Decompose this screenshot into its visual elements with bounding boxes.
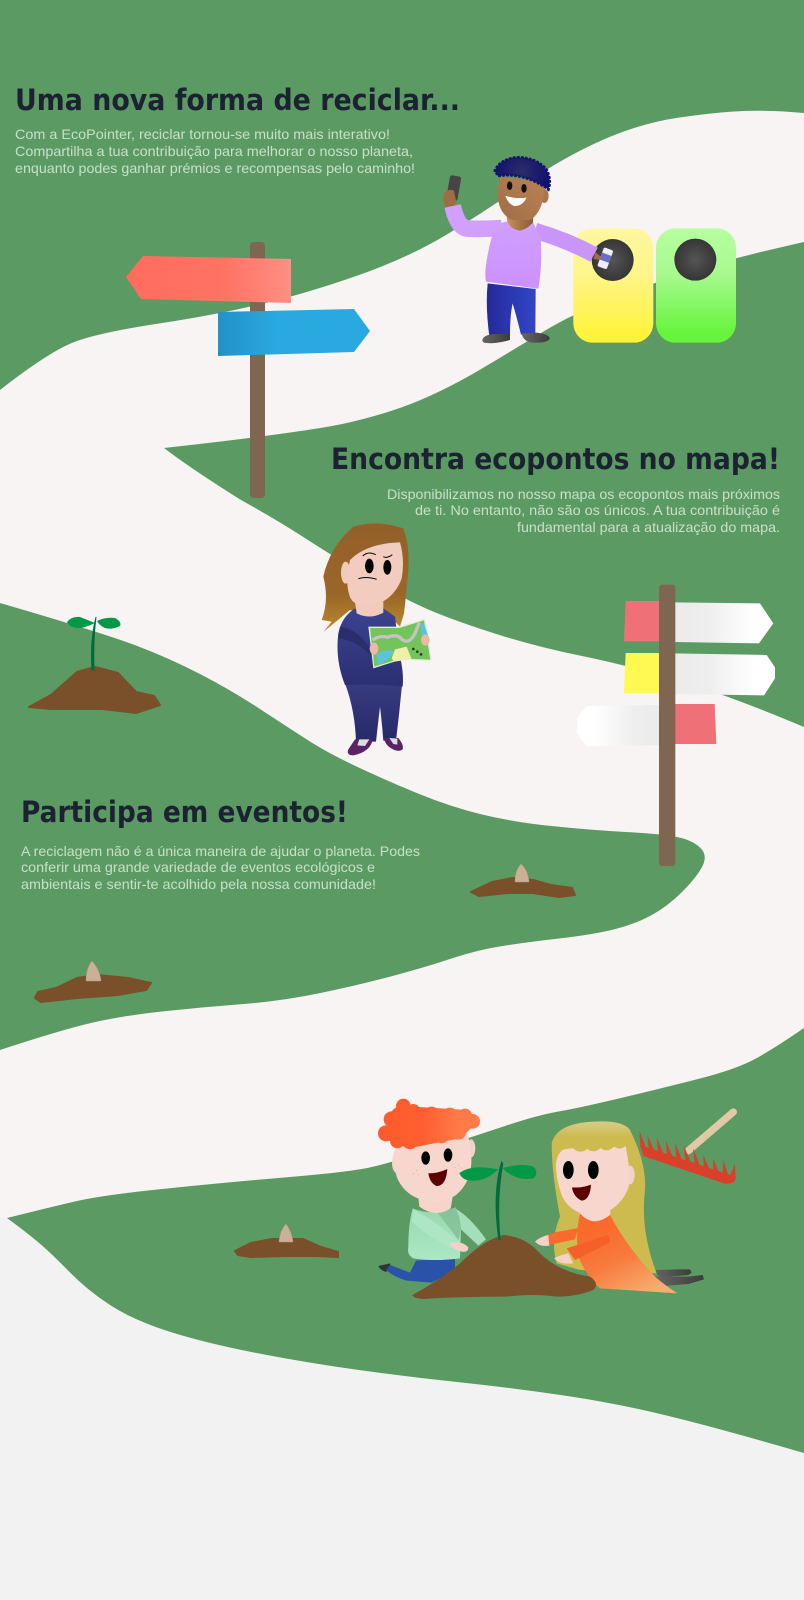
mound bbox=[235, 1239, 338, 1257]
arrow: red left bbox=[126, 256, 291, 303]
body text: events: A reciclagem não é a única maneira de ajudar o planeta. Podes bbox=[21, 843, 420, 859]
map markers bbox=[412, 648, 415, 650]
seed bbox=[86, 961, 101, 981]
girl: eyes bbox=[563, 1161, 574, 1179]
girl: ear bbox=[625, 1166, 635, 1184]
rake handle bbox=[688, 1112, 733, 1151]
green field: middle left bbox=[0, 603, 705, 1050]
girl: arm left bbox=[543, 1228, 578, 1245]
raised hand bbox=[443, 190, 456, 208]
brows and mouth bbox=[358, 553, 392, 579]
leaf left bbox=[459, 1167, 498, 1181]
body text: events: conferir uma grande variedade de eventos ecológicos e bbox=[21, 859, 375, 875]
arrow middle bbox=[624, 653, 775, 695]
green field: top bbox=[0, 0, 804, 390]
boy: face bbox=[393, 1133, 471, 1202]
bin: green bbox=[656, 228, 736, 343]
left arm bbox=[453, 206, 502, 229]
section: map text bbox=[331, 442, 780, 535]
boy: pants bbox=[386, 1257, 455, 1283]
torso bbox=[485, 222, 541, 289]
scene: children planting bbox=[378, 1099, 736, 1299]
boy: shoe bbox=[378, 1263, 391, 1272]
background: path colour bbox=[0, 0, 804, 1218]
boy: shirt bbox=[408, 1207, 461, 1260]
girl: face bbox=[556, 1143, 629, 1215]
phone bbox=[446, 175, 461, 201]
girl: bangs bbox=[553, 1137, 627, 1158]
body text: map: de ti. No entanto, não são os únicos. A tua contribuição é bbox=[415, 502, 780, 518]
eyes bbox=[365, 559, 374, 573]
stem bbox=[496, 1161, 503, 1240]
leaf right bbox=[97, 618, 120, 629]
shoes bbox=[348, 738, 403, 755]
girl: mouth bbox=[572, 1185, 591, 1201]
leaf right bbox=[503, 1165, 536, 1179]
body text: events: ambientais e sentir-te acolhido pela nossa comunidade! bbox=[21, 876, 376, 892]
girl: dress bbox=[577, 1213, 677, 1293]
right arm bbox=[535, 231, 594, 255]
girl: hands bbox=[535, 1235, 573, 1264]
green field: right bbox=[164, 242, 804, 727]
torso bbox=[337, 608, 403, 687]
neck bbox=[507, 215, 533, 231]
section: events text bbox=[21, 795, 420, 892]
sprout bbox=[459, 1161, 536, 1240]
post bbox=[250, 242, 265, 498]
boy: freckles bbox=[413, 1164, 461, 1175]
leaf left bbox=[67, 617, 95, 628]
bin: yellow bbox=[573, 228, 653, 343]
girl: hair bbox=[552, 1121, 657, 1273]
boy: hand bbox=[449, 1242, 468, 1252]
map field bbox=[392, 647, 412, 662]
ear bbox=[341, 562, 350, 584]
eyes bbox=[507, 181, 512, 190]
body text: map: fundamental para a atualização do mapa. bbox=[517, 519, 780, 535]
rake bbox=[639, 1112, 736, 1184]
mound bbox=[471, 878, 575, 897]
face bbox=[497, 177, 544, 223]
smile bbox=[505, 196, 527, 206]
body text: recycling: Compartilha a tua contribuição para melhorar o nosso planeta, bbox=[15, 143, 413, 159]
rake head bbox=[639, 1131, 736, 1184]
ear bbox=[540, 189, 549, 203]
boy: arm bbox=[412, 1209, 460, 1248]
seed bbox=[515, 864, 529, 882]
body text: recycling bbox=[15, 126, 415, 176]
boy: ears bbox=[392, 1139, 475, 1173]
green field: bottom bbox=[7, 1028, 804, 1453]
girl: shoes bbox=[653, 1269, 704, 1286]
arm shade bbox=[338, 627, 372, 657]
body text: map bbox=[387, 486, 780, 535]
seed mound: right bbox=[471, 864, 575, 897]
girl: arm right bbox=[567, 1235, 610, 1260]
hair bbox=[495, 157, 550, 189]
recycling bins bbox=[573, 228, 736, 343]
heading: recycling: Uma nova forma de reciclar... bbox=[15, 83, 460, 117]
dirt mound bbox=[412, 1235, 596, 1299]
post bbox=[659, 585, 675, 866]
boy: mouth bbox=[428, 1169, 447, 1186]
map road bbox=[373, 623, 419, 641]
character: man recycling with phone bbox=[443, 157, 613, 343]
hand and can bbox=[593, 247, 613, 269]
neck front bbox=[507, 220, 533, 231]
body text: map: Disponibilizamos no nosso mapa os ecopontos mais próximos bbox=[387, 486, 780, 502]
boy: neck bbox=[418, 1197, 453, 1213]
body text: events bbox=[21, 843, 420, 892]
section: recycling text bbox=[15, 83, 460, 176]
hair bbox=[322, 523, 409, 632]
boy: eyes bbox=[421, 1151, 430, 1165]
hands bbox=[370, 643, 378, 655]
map lake bbox=[376, 651, 394, 665]
heading: events: Participa em eventos! bbox=[21, 795, 348, 829]
sprout on dirt mound bbox=[29, 617, 160, 713]
stem bbox=[92, 617, 96, 670]
seed bbox=[279, 1224, 293, 1242]
neck bbox=[355, 602, 383, 617]
body text: recycling: enquanto podes ganhar prémios e recompensas pelo caminho! bbox=[15, 160, 415, 176]
girl: neck bbox=[579, 1208, 611, 1224]
boy: shirt shade bbox=[437, 1208, 461, 1240]
shoes bbox=[482, 333, 550, 343]
body text: recycling: Com a EcoPointer, reciclar tornou-se muito mais interativo! bbox=[15, 126, 390, 142]
seed mound: left bbox=[35, 961, 151, 1002]
face bbox=[347, 542, 403, 605]
background: bottom area bbox=[0, 1218, 804, 1600]
pants bbox=[487, 283, 536, 336]
bin hole: yellow bbox=[592, 239, 634, 281]
character: woman with map bbox=[322, 523, 432, 755]
map bbox=[368, 618, 432, 668]
mound bbox=[29, 667, 160, 713]
arrow top bbox=[624, 601, 773, 643]
map lake right bbox=[421, 623, 428, 637]
signpost: red and blue arrows bbox=[126, 242, 370, 498]
arrow bottom bbox=[577, 704, 716, 746]
signpost: white multi-arrow bbox=[577, 585, 775, 866]
bin hole: green bbox=[674, 239, 716, 281]
arrow: blue right bbox=[218, 309, 370, 356]
legs bbox=[345, 683, 402, 742]
boy: hair bbox=[378, 1099, 480, 1149]
seed mound: lower bbox=[235, 1224, 338, 1257]
boy: sleeve right bbox=[455, 1208, 486, 1246]
mound bbox=[35, 975, 151, 1002]
